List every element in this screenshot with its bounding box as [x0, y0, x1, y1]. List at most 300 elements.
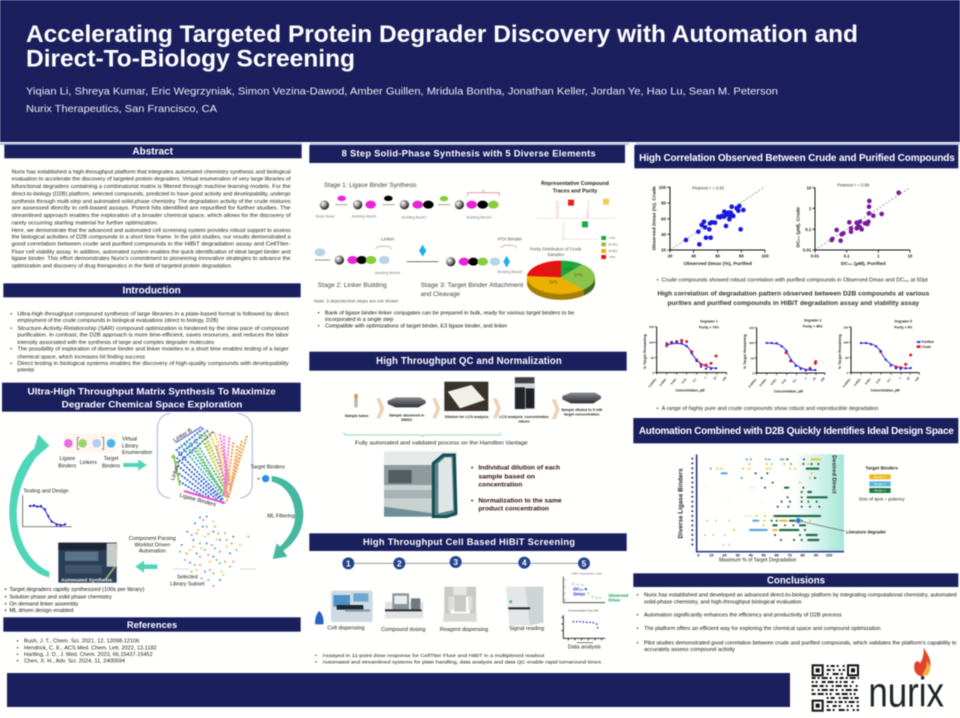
traces and purity: Traces and Purity [553, 189, 597, 195]
abstract text: evaluation to accelerate the discovery of targeted protein degraders. Virtual enumeration of very large libraries of [12, 177, 291, 183]
conclusions bullets: accurately assess compound activity [644, 647, 735, 653]
header banner [0, 0, 960, 145]
chart: degrader 1: 1 [703, 375, 708, 380]
chart: DC50 scatter: Pearson r = 0.86 [837, 183, 870, 188]
chart: degrader 1: 0.00001 [647, 377, 658, 388]
chart: DC50 scatter: 0.1 [844, 254, 850, 259]
stage 1 diagram: Building Block2 [401, 215, 426, 219]
synthesis bullets: • [318, 324, 320, 330]
chart: design space dot plot: 20 [722, 553, 727, 558]
degrader chart legend [916, 340, 934, 349]
arrow: subset to automation [135, 561, 157, 573]
chart: purity pie: 27% [574, 273, 583, 278]
panel: automation design space [633, 418, 958, 564]
target binders label [250, 464, 285, 483]
degradation subheading: purities and purified compounds in HiBiT degradation assay and viability assay [667, 300, 920, 307]
chart: degrader 3: Degrader 3 [804, 319, 822, 323]
selected library scatter [170, 517, 256, 587]
virtual library enumeration: Ligase [59, 456, 75, 462]
QC bullets: • [471, 497, 473, 504]
data analysis charts: Dmax [608, 597, 621, 602]
chart: design space dot plot: 30 [735, 553, 741, 558]
chart: degrader 5: 0.0001 [853, 377, 862, 387]
chart: degrader 5: 0.01 [875, 377, 882, 384]
panel: conclusions [633, 573, 958, 716]
chart: degrader 3: % Target Remaining [743, 334, 747, 369]
abstract text: good correlation between crude and purified compounds in the HiBiT degradation assay and CellTiter- [12, 242, 291, 248]
chart: design space dot plot: 80 [800, 553, 806, 558]
synthesis bullets: Compatible with optimizations of target binder, E3 ligase binder, and linker [325, 324, 508, 330]
combinatorial matrix: Ligase Binders [179, 493, 217, 508]
introduction bullets: • [10, 347, 12, 353]
panel: 8 step solid-phase synthesis [309, 145, 625, 330]
HiBiT heading: High Throughput Cell Based HiBiT Screening [363, 537, 575, 547]
chart: DC50 scatter [795, 183, 913, 267]
purity legend: >75% [608, 236, 616, 240]
conclusions bullets: Pilot studies demonstrated good correlation between crude and purified compounds, which validates the platform's capability to [644, 640, 957, 646]
chart: DC50 scatter: 1 [809, 206, 812, 211]
chart: DC50 scatter: 1 [877, 254, 880, 259]
conclusions bullets: The platform offers an efficient way for exploring the chemical space and compound optimization [644, 626, 881, 632]
chart: purity pie: Purity Distribution of Crude [530, 247, 582, 252]
degrader chart legend: Crude [922, 345, 931, 349]
chart: degrader 1: Degrader 1 [700, 320, 718, 324]
chart: degrader 3: 10 [812, 376, 817, 382]
references list: • [17, 639, 19, 645]
automation heading [633, 418, 958, 443]
chart: degrader 3 [743, 319, 826, 393]
matrix synthesis bullets [5, 587, 145, 614]
correlation heading: High Correlation Observed Between Crude and Purified Compounds [639, 153, 955, 164]
automation caption: Fully automated and validated process on the Hamilton Vantage [355, 441, 528, 447]
chart: degrader 3: 100 [749, 341, 754, 345]
degradation bullet: • [657, 406, 659, 412]
chart: design space dot plot: Maximum % of Target Degradation [719, 558, 796, 564]
numbered steps [342, 556, 590, 569]
traces and purity [537, 181, 615, 239]
component parsing label: Component Parsing [129, 536, 176, 542]
panel: ultra-high throughput matrix synthesis [2, 383, 303, 614]
virtual library enumeration: Binders [102, 464, 120, 470]
chart: purity pie: 18% [564, 266, 573, 271]
HiBiT bullets [315, 653, 602, 666]
chart: degrader 5: % Target Remaining [838, 334, 842, 369]
virtual library enumeration [58, 433, 152, 470]
chart: Dmax scatter: 100 [761, 254, 769, 259]
chart: design space dot plot: Literature degrader [846, 530, 886, 535]
chart: DC50 scatter: 0.01 [803, 248, 812, 253]
chart: Dmax scatter: 20 [668, 254, 673, 259]
virtual library enumeration: Enumeration [122, 450, 152, 456]
numbered steps: 5 [582, 558, 587, 568]
chart: degrader 1: 0.0001 [658, 377, 668, 387]
footer bar [7, 673, 790, 707]
target binders legend: Binder 3 [874, 489, 886, 493]
stage 3 diagram: POI Binder [498, 237, 523, 243]
chart: degrader 3: 0.00001 [747, 377, 758, 389]
target binders legend: Binder 2 [874, 482, 886, 486]
numbered steps: 3 [453, 557, 458, 567]
abstract text: Here, we demonstrate that the advanced and automated cell screening system provides robust support to assess [12, 228, 291, 234]
chart: Dmax scatter: 40 [691, 254, 697, 259]
automation heading: Automation Combined with D2B Quickly Identifies Ideal Design Space [639, 426, 954, 437]
stage 3 diagram: Building Block5 [497, 270, 522, 274]
references heading [3, 617, 301, 632]
chart: Dmax scatter: Pearson r = 0.81 [692, 185, 725, 190]
chart: degrader 5: 1 [898, 376, 902, 380]
abstract text: are assessed directly in cell-based assays. Potent hits identified are repurified for further studies. The [12, 206, 291, 212]
introduction bullets: Ultra-high throughput compound synthesis of large libraries in a plate-based format is followed by direct [17, 311, 289, 317]
photo: Hamilton Vantage [384, 452, 457, 517]
chart: degrader 5: 0.00001 [842, 377, 852, 388]
stage 2 diagram [315, 237, 400, 289]
chart: design space dot plot: 40 [748, 553, 754, 558]
abstract text [12, 170, 291, 270]
matrix synthesis bullets: Target degraders rapidly synthesized (100s per library) [9, 587, 145, 593]
chart: degrader 3: 1 [803, 376, 808, 380]
QC process flow: LCG analysis: concentration [499, 415, 549, 419]
numbered steps: 1 [346, 558, 351, 568]
introduction bullets: intensity associated with the synthesis of large and complex degrader molecules [17, 340, 215, 346]
conclusions heading [633, 573, 958, 587]
chart: degrader 1: % Target Remaining [643, 334, 647, 369]
combinatorial matrix: Linker A [170, 460, 182, 481]
HiBiT bullets: • [315, 660, 317, 666]
data analysis charts: Data analysis [568, 645, 601, 651]
QC process flow: Sample tubes [345, 414, 369, 418]
conclusions heading: Conclusions [767, 576, 825, 587]
chart: degrader 5: 100 [843, 341, 849, 345]
chart: DC50 scatter: 0.1 [805, 227, 812, 232]
chart: design space dot plot: 0 [697, 553, 700, 558]
arrow: testing to enumeration cycle [9, 434, 49, 577]
references list: Hendrick, C. E., ACS Med. Chem. Lett. 2022, 13,1182 [24, 645, 157, 651]
correlation bullet: • [657, 278, 659, 284]
QC bullets: sample based on [478, 473, 535, 480]
abstract text: rarely occurring starting material for further optimization. [12, 220, 158, 226]
chart: purity pie: Samples [547, 252, 564, 257]
HiBiT bullets: Automated and streamlined systems for plate handling, data analysis and data QC enable rapid turnaround times [322, 660, 602, 666]
purity legend [601, 236, 618, 259]
target binders legend: Target Binders [865, 465, 898, 470]
degradation subheading [657, 291, 930, 307]
conclusions bullets: solid-phase chemistry, and high-throughput biological evaluation [644, 599, 802, 605]
correlation heading [634, 145, 958, 168]
abstract text: ligase binder. This effort demonstrates Nurix's commitment to pioneering innovative strategies to advance the [12, 256, 291, 262]
chart: Dmax scatter: 80 [739, 254, 744, 259]
abstract text: direct-to-biology (D2B) platform, selected compounds, predicted to have good activity and developability, undergo [12, 192, 291, 198]
QC bullets [471, 464, 562, 512]
conclusions bullets: • [637, 593, 639, 599]
matrix synthesis bullets: • [5, 608, 7, 614]
virtual library enumeration: Virtual [122, 437, 137, 443]
target binders legend [859, 465, 905, 501]
instrument 1: cell dispensing: Cell dispensing [327, 626, 365, 632]
purity legend: <25% [608, 255, 616, 259]
QC process flow [344, 377, 602, 437]
data analysis charts: Observed [608, 593, 629, 598]
chart: design space dot plot: 50 [761, 553, 767, 558]
combinatorial matrix: Linker B [173, 427, 194, 444]
abstract text: the biological activities of D2B compounds in a short time frame. In the pilot studies, our results demonstrated a [12, 234, 291, 240]
target binders legend: Binder 1 [874, 475, 886, 479]
degradation subheading: High correlation of degradation pattern observed between D2B compounds at various [657, 291, 930, 298]
chart: Dmax scatter: 80 [661, 201, 667, 206]
degrader chart legend: Purified [922, 340, 934, 344]
photo: automated synthesis: Automated Synthesis [61, 577, 112, 583]
QC process flow: Dilution for LCG analysis [445, 415, 489, 419]
panel: HiBiT screening [309, 533, 629, 666]
chart: degrader 5: 0.1 [886, 377, 892, 383]
abstract text: streamlined approach enables the exploration of a broader chemical space, which allows for the discovery of [12, 213, 291, 219]
chart: DC50 scatter: DC₅₀ (µM), Purified [841, 261, 886, 267]
abstract text: optimization and discovery of drug therapeutics in the field of targeted protein degradation. [12, 264, 232, 270]
instrument 2: compound dosing: Compound dosing [381, 627, 426, 633]
synthesis heading: 8 Step Solid-Phase Synthesis with 5 Diverse Elements [342, 149, 596, 159]
abstract heading: Abstract [132, 147, 174, 158]
chart: degrader 1: Purity = 74% [699, 326, 719, 330]
QC process flow: Sample dissolved in [389, 414, 424, 418]
introduction bullets: potential [17, 368, 34, 374]
abstract text: Nurix has established a high-throughput platform that integrates automated chemistry synthesis and biological [12, 170, 291, 176]
chart: degrader 3: 0.1 [792, 377, 798, 383]
chart: Dmax scatter: Observed Dmax (%), Crude [652, 186, 658, 250]
chart: Dmax scatter: Observed Dmax (%), Purified [683, 261, 752, 267]
chart: degrader 3: 0.001 [770, 377, 778, 386]
introduction bullets: • [10, 361, 12, 367]
introduction bullets: Direct testing in biological systems enables the discovery of high-quality compounds with developability [17, 361, 289, 367]
stage 1 diagram: Building Block1 [352, 214, 377, 218]
instrument 1: cell dispensing [315, 591, 373, 632]
QC process flow: DMSO [401, 418, 412, 422]
matrix synthesis heading: Ultra-High Throughput Matrix Synthesis To Maximize [27, 387, 276, 397]
references heading: References [127, 620, 177, 630]
introduction bullets: employment of the crude compounds in biological evaluations (direct to biology, D2B) [17, 318, 219, 324]
chart: degrader 5 [838, 320, 920, 393]
nurix logo: nurix [868, 669, 944, 716]
photo: automated synthesis [58, 543, 117, 583]
chart: degrader 3: 50 [751, 356, 754, 360]
chart: degrader 3: 0 [752, 371, 754, 375]
chart: degrader 5: 0.001 [864, 377, 872, 386]
target binders label: Target Binders [250, 464, 285, 470]
matrix synthesis bullets: ML driven design enabled [9, 608, 73, 614]
virtual library enumeration: Binders [58, 464, 77, 470]
chart: DC50 scatter: 0.01 [811, 254, 820, 259]
conclusions bullets: • [637, 626, 639, 632]
nurix logo [868, 647, 944, 716]
chart: DC50 scatter: 10 [908, 254, 913, 259]
chart: design space dot plot: 10 [709, 553, 714, 558]
QC bullets: product concentration [478, 505, 549, 512]
introduction heading [3, 283, 301, 297]
data analysis charts: HiBiT degradation data [571, 572, 602, 576]
references list: Chen, X. H., Adv. Sci. 2024, 11, 2400594 [24, 659, 125, 665]
purity legend: 50-75% [608, 242, 618, 246]
chart: degrader 5: 50 [845, 356, 849, 360]
ML filtering label: ML Filtering [267, 514, 295, 520]
data analysis charts: Concentration (log nM) [568, 608, 599, 612]
stage 2 diagram: Linker [381, 237, 395, 243]
virtual library enumeration: Linkers [80, 460, 97, 466]
chart: degrader 1: 100 [721, 375, 728, 382]
chart: design space dot plot: 100 [826, 553, 833, 558]
chart: degrader 5: 100 [914, 376, 920, 382]
traces and purity: Representative Compound [541, 181, 609, 187]
chart: degrader 3: 150 [749, 326, 754, 330]
chart: design space dot plot: Diverse Ligase Binders [677, 468, 684, 538]
target binders legend: Size of spot = potency [859, 496, 905, 501]
abstract text: bifunctional degraders containing a combinatorial matrix is filtered through machine learning models. For the [12, 184, 291, 190]
instrument 4: signal reading: Signal reading [509, 626, 544, 632]
chart: degrader 5: Degrader 5 [895, 320, 912, 324]
introduction bullets: • [10, 326, 12, 332]
matrix synthesis bullets: • [5, 594, 7, 600]
component parsing label: Worklist Driven [134, 543, 170, 549]
HiBiT heading [309, 533, 627, 551]
chart: testing and design curve: Testing and Design [23, 489, 69, 495]
chart: degrader 5: Purity = 6% [894, 326, 912, 330]
stage 2 diagram: Stage 2: Linker Building [318, 282, 387, 289]
component parsing label [129, 536, 176, 555]
stage 1 diagram [316, 182, 499, 220]
purity legend: 25-50% [608, 249, 618, 253]
conclusions bullets [637, 593, 957, 653]
QC heading: High Throughput QC and Normalization [376, 356, 562, 367]
instrument 3: reagent dispensing: Reagent dispensing [440, 627, 488, 633]
QC process flow: target concentration [564, 412, 599, 416]
chart: Dmax scatter [652, 185, 769, 267]
introduction heading: Introduction [123, 286, 181, 297]
authors: Yiqian Li, Shreya Kumar, Eric Wegrzyniak, Simon Vezina-Dawod, Amber Guillen, Mridula Bontha, Jonathan Keller, Jordan Ye, Hao Lu, Sean M. Peterson [26, 85, 778, 97]
chart: testing and design curve [23, 489, 72, 527]
chart: purity pie [527, 247, 595, 300]
QC bullets: • [471, 464, 473, 471]
abstract text: Fluor cell viability assay. In addition, automated system enables the quick identification of ideal target binder and [12, 249, 291, 255]
stage 3 diagram [407, 237, 524, 298]
QC process flow: Sample diluted to 5 mM [561, 408, 602, 412]
HiBiT bullets: Assayed in 11-point dose response for CellTiter Fluor and HiBiT in a multiplexed readout [322, 653, 545, 659]
data analysis charts [561, 572, 629, 651]
chart: DC50 scatter: 10 [807, 185, 812, 190]
stage 3 diagram: Stage 3: Target Binder Attachment [421, 282, 524, 289]
chart: degrader 1: 0.001 [670, 377, 678, 386]
component parsing label: Automation [139, 549, 166, 555]
references list [17, 639, 157, 665]
chart: degrader 5: Concentration, µM [870, 389, 900, 393]
panel: abstract and introduction [3, 145, 302, 374]
stage 3 diagram: and Cleavage [421, 291, 460, 298]
chart: degrader 3: 0.0001 [758, 377, 768, 387]
abstract text: synthesis through multi-step and automated solid-phase chemistry. The degradation activity of the crude mixtures [12, 199, 291, 205]
target binders label: + [257, 477, 260, 483]
chart: design space dot plot: 90 [814, 553, 819, 558]
synthesis bullets [318, 310, 574, 330]
introduction bullets: purification. In contrast, the D2B approach is more time-efficient, saves resources, and reduces the labor [17, 333, 289, 339]
introduction bullets: Structure-Activity-Relationship (SAR) compound optimization is hindered by the slow pace of compound [17, 326, 289, 332]
virtual library enumeration: Target [104, 456, 119, 462]
numbered steps: 4 [522, 558, 527, 568]
synthesis bullets: • [318, 310, 320, 316]
matrix synthesis bullets: Solution phase and solid phase chemistry [9, 594, 112, 600]
QC bullets: Normalization to the same [478, 497, 562, 504]
chart: Dmax scatter: 60 [715, 254, 721, 259]
chart: degrader 1: 0 [652, 371, 654, 375]
synthesis bullets: Bank of ligase binder-linker conjugates can be prepared in bulk, ready for various target binders to be [325, 310, 574, 316]
synthesis bullets: incorporated in a single step [325, 317, 393, 323]
chart: Dmax scatter: 20 [661, 248, 667, 253]
conclusions bullets: Automation significantly enhances the efficiency and productivity of D2B process [644, 613, 842, 619]
arrow: ML filtering [272, 476, 303, 559]
chart: Dmax scatter: 40 [661, 232, 667, 237]
QR code [812, 664, 859, 712]
references list: Bush, J. T., Chem. Sci. 2021, 12, 12098-12106 [24, 639, 139, 645]
chart: design space dot plot: Desired Direct [830, 455, 836, 494]
matrix synthesis bullets: On demand linker assembly [9, 602, 79, 608]
chart: degrader 1: 10 [712, 375, 718, 381]
chart: degrader 1: 50 [651, 356, 654, 360]
title: Direct-To-Biology Screening [26, 46, 355, 72]
panel: references [3, 617, 301, 665]
chart: DC50 scatter: DC₅₀ (µM), Crude [795, 207, 801, 248]
HiBiT bullets: • [315, 653, 317, 659]
references list: Hartling, J. D., J. Med. Chem. 2023, 66,15437-15452 [24, 652, 153, 658]
chart: degrader 3: Concentration, µM [774, 389, 803, 393]
chart: degrader 1: 100 [649, 341, 654, 345]
introduction bullets [10, 311, 289, 374]
chart: degrader 5: 10 [906, 376, 911, 381]
stage 2 diagram: Building Block4 [375, 271, 400, 275]
conclusions bullets: • [637, 640, 639, 646]
synthesis heading [309, 145, 625, 163]
degradation bullet: A range of highly pure and crude compounds show robust and reproducible degradation [662, 406, 878, 412]
chart: degrader 1: 0.1 [692, 377, 698, 383]
virtual library enumeration: Library [122, 444, 139, 450]
conclusions bullets: Nurix has established and developed an advanced direct-to-biology platform by integrating computational chemistry, automated [644, 593, 957, 599]
instrument 4: signal reading [506, 587, 544, 632]
introduction bullets: The possibility of exploration of diverse binder and linker moieties in a short time enables testing of a larger [17, 347, 289, 353]
title: Accelerating Targeted Protein Degrader Discovery with Automation and [26, 21, 858, 48]
stage 1 diagram: Building Block3 [466, 216, 491, 220]
references list: • [17, 659, 19, 665]
QC heading [309, 352, 627, 371]
QC bullets: concentration [478, 481, 523, 488]
numbered steps: 2 [397, 558, 402, 568]
panel: degradation pattern [643, 291, 934, 412]
matrix synthesis bullets: • [5, 587, 7, 593]
chart: degrader 1: 150 [649, 325, 654, 329]
arrow: enumeration to matrix [123, 459, 147, 471]
instrument 2: compound dosing [381, 593, 426, 633]
chart: degrader 3: 0.01 [781, 377, 788, 385]
matrix synthesis heading: Degrader Chemical Space Exploration [62, 399, 242, 409]
chart: design space dot plot [677, 454, 886, 564]
matrix synthesis bullets: • [5, 602, 7, 608]
affiliation: Nurix Therapeutics, San Francisco, CA [26, 103, 217, 115]
chart: degrader 1 [643, 320, 728, 392]
QC process flow: values [518, 419, 530, 423]
data analysis charts: DC₅₀ ● [573, 587, 588, 592]
chart: degrader 1: 0.01 [681, 377, 688, 384]
combinatorial matrix [157, 413, 252, 508]
introduction bullets: • [10, 311, 12, 317]
correlation bullet: Crude compounds showed robust correlation with purified compounds in Observed Dmax and DC₅₀ at 50pt [662, 278, 928, 284]
panel: high correlation [634, 145, 958, 284]
chart: degrader 3: Purity = 48% [803, 325, 823, 329]
chart: degrader 1: Concentration, µM [675, 388, 705, 392]
selected library scatter: Selected [177, 574, 198, 580]
introduction bullets: chemical space, which increases hit finding success [17, 354, 145, 360]
